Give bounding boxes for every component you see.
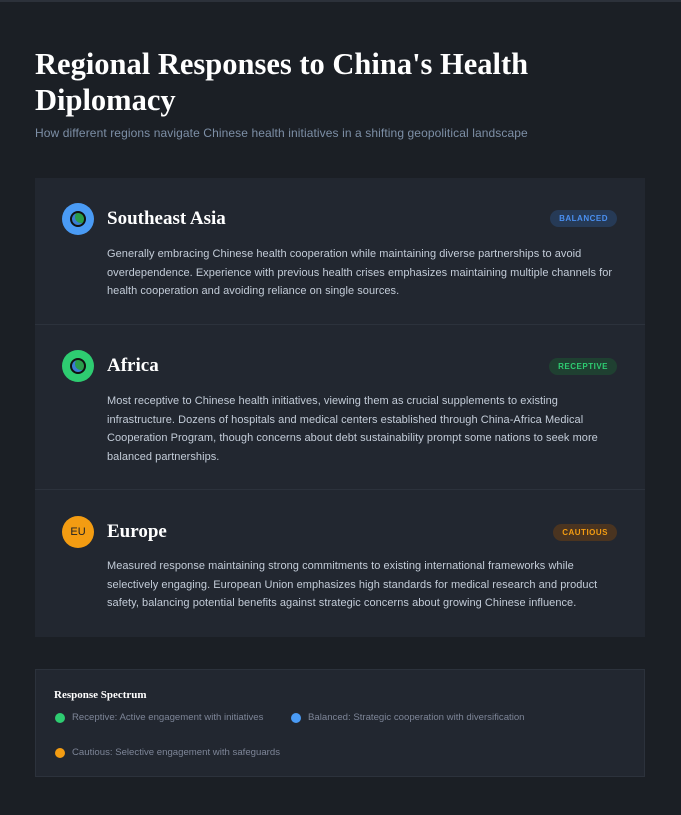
icon: globe blue — [62, 203, 94, 235]
badge receptive — [549, 358, 617, 375]
text: Generally embracing Chinese health cooperation while maintaining diverse partnerships to avoid overdependence. Experience with previous health crises emphasizes maintaining multiple channels for health cooperation and avoiding reliance on single sources. — [107, 248, 612, 297]
legend heading: Response Spectrum — [54, 689, 147, 701]
title: Regional Responses to China's Health Diplomacy — [35, 47, 528, 117]
badge receptive: RECEPTIVE — [558, 362, 608, 371]
icon: globe green — [62, 350, 94, 382]
legend receptive: Receptive: Active engagement with initiatives — [72, 712, 263, 723]
text: Measured response maintaining strong commitments to existing international frameworks while selectively engaging. European Union emphasizes high standards for medical research and product safety, balancing potential benefits against strategic concerns about growing Chinese influence. — [107, 560, 597, 609]
section: southeast asia — [35, 178, 645, 325]
text: Most receptive to Chinese health initiatives, viewing them as crucial supplements to existing infrastructure. Dozens of hospitals and medical centers established through China-Africa Medical Cooperation Program, though concerns about debt sustainability prompt some nations to seek more balanced partnerships. — [107, 395, 598, 463]
subtitle: How different regions navigate Chinese health initiatives in a shifting geopolitical landscape — [35, 126, 528, 140]
section: europe — [62, 516, 617, 609]
section: africa — [35, 325, 645, 490]
badge cautious: CAUTIOUS — [562, 528, 608, 537]
badge balanced — [550, 210, 617, 227]
badge balanced: BALANCED — [559, 214, 608, 223]
icon: EU: EU — [70, 526, 86, 538]
badge cautious — [553, 524, 617, 541]
panel: regions — [35, 178, 645, 637]
icon: EU — [62, 516, 94, 548]
legend balanced: Balanced: Strategic cooperation with diversification — [308, 712, 525, 723]
heading africa: Africa — [107, 355, 159, 376]
legend cautious: Cautious: Selective engagement with safeguards — [72, 747, 280, 758]
legend — [35, 669, 645, 777]
heading southeast asia: Southeast Asia — [107, 208, 226, 229]
heading europe: Europe — [107, 521, 167, 542]
